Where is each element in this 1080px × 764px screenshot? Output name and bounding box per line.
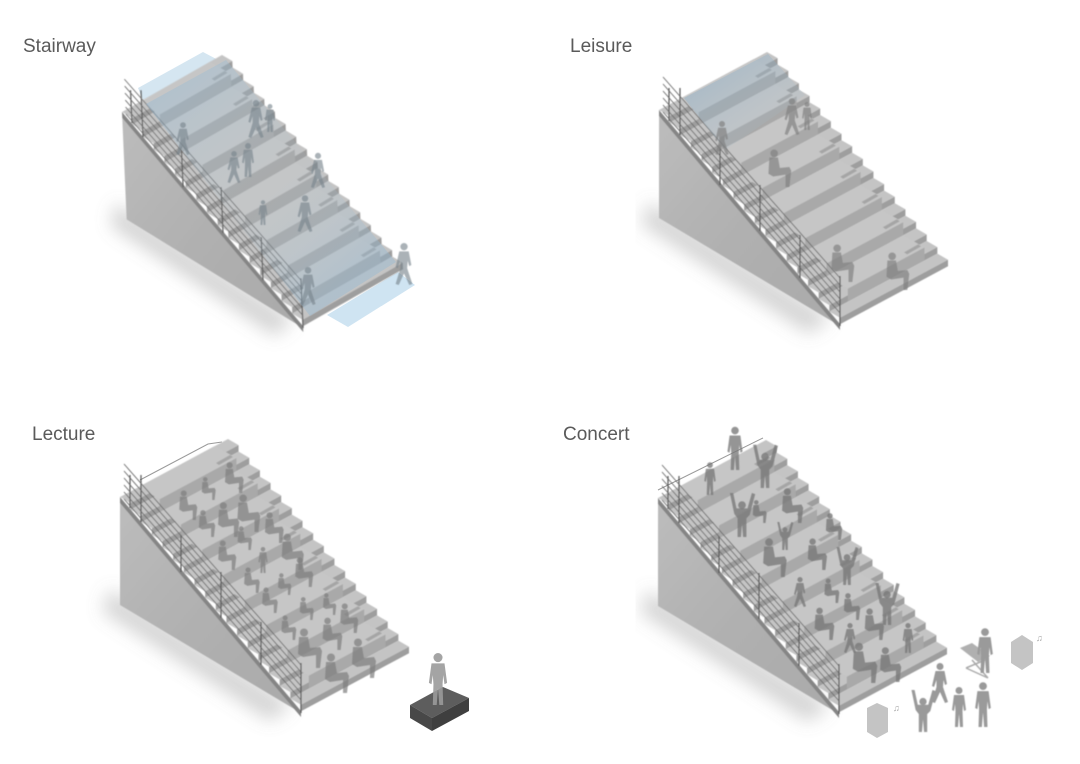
seated audience [179, 462, 376, 693]
panel: Lecture [32, 424, 469, 731]
music note right: ♫ [1036, 633, 1043, 643]
lecturer [429, 653, 447, 705]
blue overlay on treads [146, 60, 396, 316]
heading: Lecture: Lecture [32, 424, 95, 445]
band on the ground [911, 628, 993, 732]
blue slab behind the stair top [138, 52, 222, 100]
heading: Concert: Concert [563, 424, 630, 445]
thin frame at the stair top [658, 438, 763, 490]
right speaker [1011, 635, 1033, 670]
podium box [410, 687, 469, 731]
lecturer on podium [410, 653, 469, 731]
pedestrians [176, 100, 412, 305]
musicians [911, 628, 993, 732]
heading: Stairway: Stairway [23, 36, 96, 57]
staircase with wall and railing [102, 54, 406, 337]
music note left: ♫ [893, 703, 900, 713]
people resting on the steps [715, 98, 909, 290]
left speaker [867, 703, 888, 738]
panel: Stairway [23, 36, 415, 337]
thin frame at the stair top [140, 442, 222, 480]
staircase with wall and railing [641, 52, 948, 334]
keyboard stand [960, 643, 990, 678]
panel: Leisure [570, 36, 948, 334]
crowd on the steps [704, 427, 913, 683]
blue slab at the stair foot [327, 272, 415, 327]
panel: Concert [563, 424, 1043, 738]
blue overlay on upper tiers [684, 54, 805, 150]
staircase with wall and railing [102, 439, 409, 721]
heading: Leisure: Leisure [570, 36, 632, 57]
staircase with wall and railing [640, 440, 947, 722]
